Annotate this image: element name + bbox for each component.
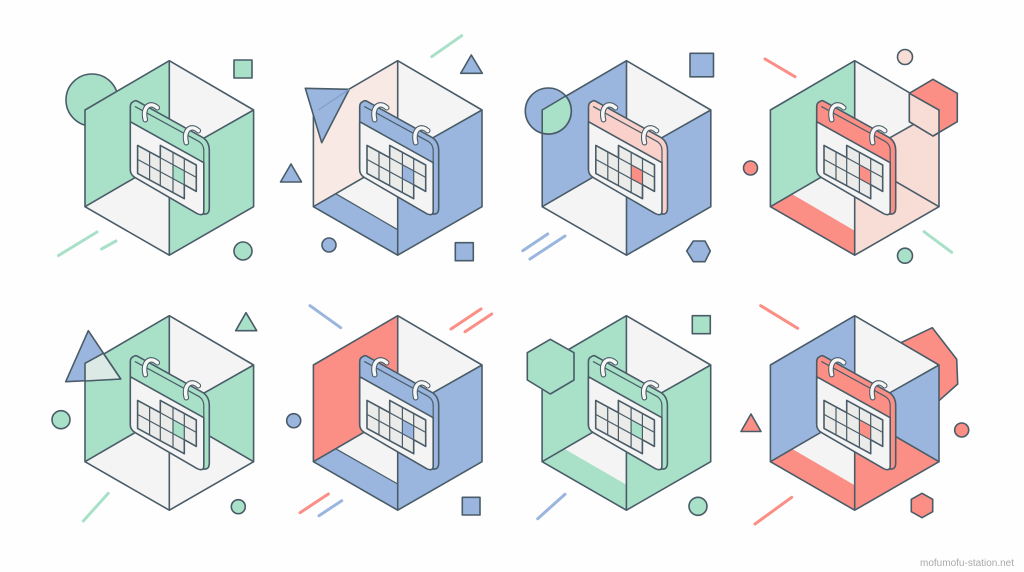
icon: green circle — [234, 242, 252, 260]
motion line, bottom — [755, 497, 792, 524]
cube — [770, 316, 939, 510]
icon: small blue triangle, top — [461, 55, 482, 73]
icon: green circle, left — [52, 411, 70, 429]
icon: large blue triangle — [305, 88, 349, 143]
icon: small blue triangle, left — [280, 164, 302, 182]
motion line, coral — [765, 59, 795, 77]
motion line, coral bottom — [300, 494, 328, 513]
cube — [313, 61, 482, 255]
cube — [85, 61, 254, 255]
icon: coral circle — [744, 161, 758, 175]
panel: blue and pink cube, top row second — [280, 36, 482, 261]
motion line — [538, 494, 565, 519]
panel: blue cube with pink calendar, top row third — [523, 53, 714, 262]
icon: large green hexagon — [527, 339, 574, 394]
icon: pale pink circle — [898, 50, 912, 64]
cube — [85, 316, 254, 510]
icon: blue square — [455, 243, 473, 261]
icon: green circle — [898, 248, 912, 263]
icon: calendar — [130, 101, 209, 215]
icon: calendar — [817, 101, 896, 215]
icon: large green circle — [66, 74, 118, 126]
motion line — [432, 36, 462, 57]
panel: green cube, top left — [58, 60, 254, 260]
motion line, green — [924, 232, 952, 252]
motion lines — [523, 234, 565, 259]
cube — [313, 316, 482, 510]
icon: calendar — [588, 101, 668, 215]
icon: blue square — [690, 53, 714, 77]
icon: green square — [692, 316, 710, 334]
icon: green circle, bottom right — [231, 500, 245, 514]
icon: green triangle — [236, 313, 257, 331]
cube — [542, 316, 711, 510]
panel: blue and coral cube, bottom right — [741, 306, 969, 524]
panel: green cube with green floor, bottom row third — [527, 316, 711, 519]
cube — [542, 61, 711, 255]
icon: blue circle with green overlap — [525, 88, 571, 134]
panel: green and coral cube, top right — [744, 50, 957, 263]
icon: calendar — [588, 356, 667, 470]
motion line, top — [761, 306, 798, 328]
motion lines — [58, 232, 116, 256]
icon: blue square — [462, 497, 480, 515]
motion line, blue bottom — [319, 501, 342, 516]
motion lines, coral top — [451, 309, 492, 332]
panel: green cube, bottom left — [52, 313, 257, 521]
icon: calendar — [817, 356, 896, 470]
icon: green square — [234, 60, 252, 78]
icon: large blue triangle with pale overlap — [66, 331, 121, 382]
icon: green circle — [689, 497, 707, 515]
icon: calendar — [360, 101, 439, 215]
icon: coral circle — [955, 423, 969, 437]
icon: blue circle — [322, 238, 336, 252]
icon: blue hexagon — [687, 241, 710, 262]
icon: coral hexagon with pink overlap — [909, 79, 957, 136]
cube — [770, 61, 939, 255]
motion line, blue top — [310, 306, 341, 328]
icon: calendar — [130, 356, 209, 470]
icon: blue circle — [287, 414, 301, 428]
icon: coral triangle — [741, 414, 761, 432]
icon: coral polygon behind cube — [902, 328, 958, 401]
panel: coral and blue cube, bottom row second — [287, 306, 492, 516]
icon: coral hexagon — [911, 493, 933, 518]
icon: calendar — [360, 356, 439, 470]
watermark text: mofumofu-station.net — [920, 558, 1014, 569]
motion line — [83, 493, 108, 521]
